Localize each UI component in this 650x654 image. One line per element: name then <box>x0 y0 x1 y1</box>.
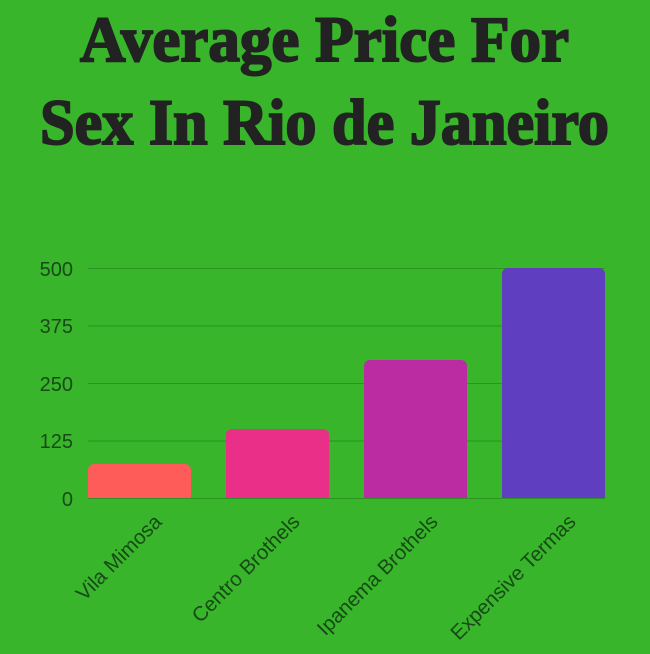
bar: Centro Brothels <box>226 429 329 498</box>
y axis labels <box>40 259 73 511</box>
y axis labels: 375 <box>40 316 73 338</box>
x axis labels: Ipanema Brothels <box>313 510 443 640</box>
bar: Expensive Termas <box>502 268 605 498</box>
y axis labels: 250 <box>40 374 73 396</box>
title <box>40 4 609 159</box>
bar: Ipanema Brothels <box>364 360 467 498</box>
y axis labels: 500 <box>40 259 73 281</box>
bar: Vila Mimosa <box>88 464 191 498</box>
title: Sex In Rio de Janeiro <box>40 87 609 159</box>
y axis labels: 125 <box>40 431 73 453</box>
x axis labels: Expensive Termas <box>446 510 581 645</box>
x axis labels <box>72 510 581 645</box>
x axis labels: Centro Brothels <box>188 510 305 627</box>
bar chart <box>88 268 605 498</box>
x axis labels: Vila Mimosa <box>72 510 167 605</box>
title: Average Price For <box>80 4 569 76</box>
y axis labels: 0 <box>62 489 73 511</box>
